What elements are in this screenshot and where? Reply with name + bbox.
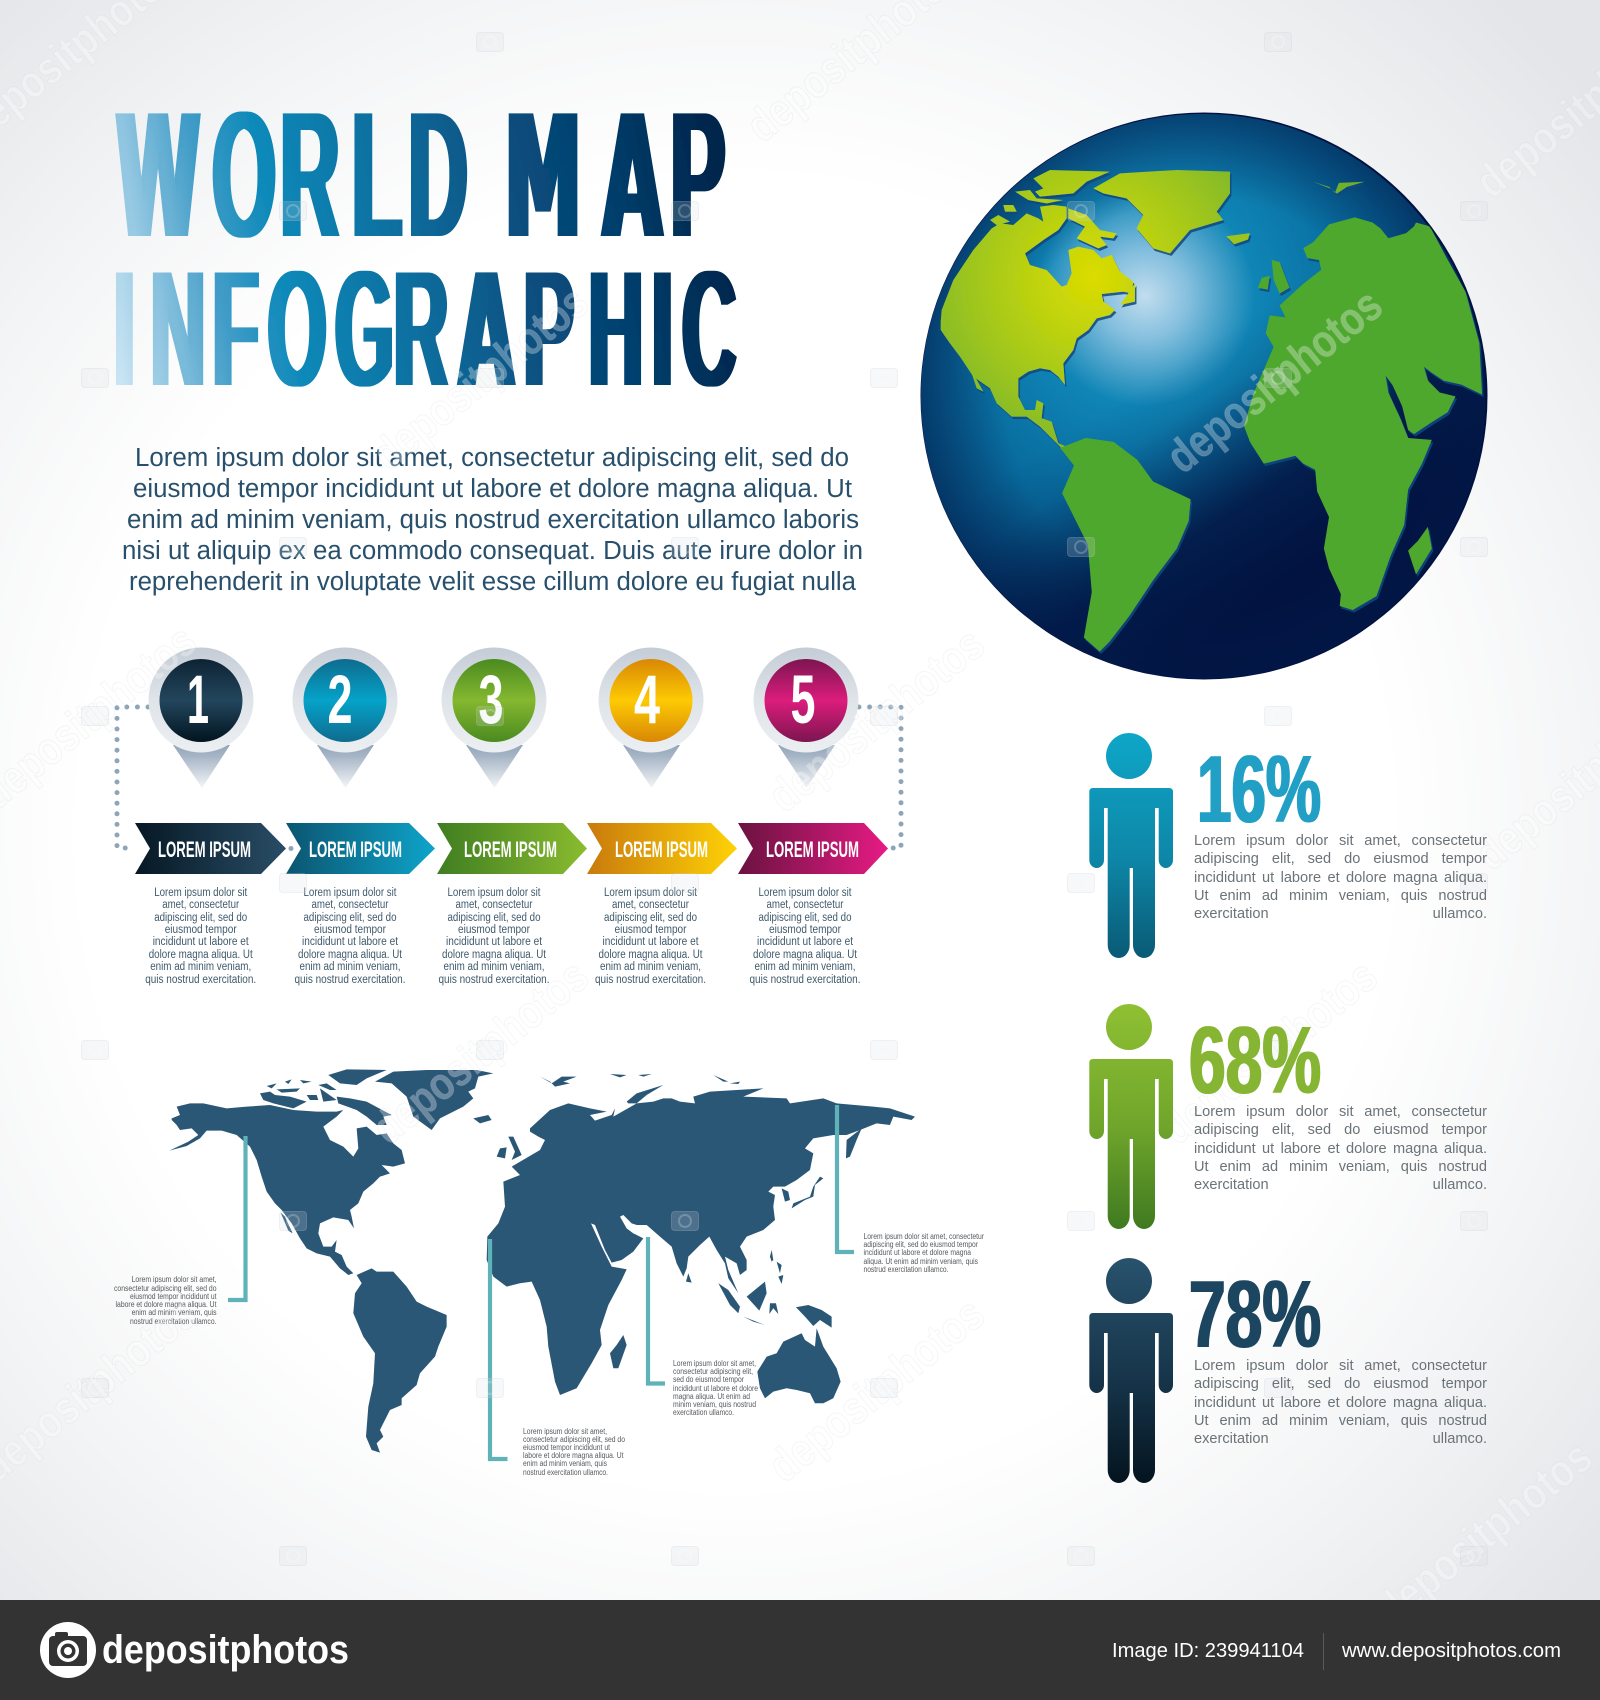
callout text 2: enim ad minim veniam, quis <box>523 1459 607 1468</box>
callout text 3: sed do eiusmod tempor <box>673 1375 744 1384</box>
pin 4: 4 <box>634 661 660 738</box>
step 4 description: enim ad minim veniam, <box>600 961 701 973</box>
step 2 description: quis nostrud exercitation. <box>294 974 406 986</box>
pin 4 <box>598 648 704 788</box>
step 1 description <box>145 887 256 986</box>
footer bar <box>0 1600 1600 1700</box>
callout text 3: magna aliqua. Ut enim ad <box>673 1392 750 1401</box>
text: depositphotos <box>362 949 598 1154</box>
pin 3 <box>442 648 546 788</box>
intro text block: Lorem ipsum dolor sit amet, consectetur adipiscing elit, sed do <box>135 444 849 472</box>
step 3 description: eiusmod tempor <box>458 924 530 936</box>
intro text block: reprehenderit in voluptate velit esse cillum dolore eu fugiat nulla <box>129 568 857 596</box>
callout text 2: consectetur adipiscing elit, sed do <box>523 1435 625 1444</box>
callout text 3: minim veniam, quis nostrud <box>673 1400 756 1409</box>
callout text 1 <box>114 1275 217 1326</box>
step 4 description: incididunt ut labore et <box>602 936 699 948</box>
step 5 description <box>750 887 860 986</box>
arrow 4 <box>587 823 737 874</box>
callout line 4 <box>837 1105 854 1252</box>
step 5 description: quis nostrud exercitation. <box>750 974 860 986</box>
callout line 2 <box>490 1239 508 1459</box>
stat paragraph: Ut enim ad minim veniam, quis nostrud <box>1194 888 1487 904</box>
step 3 description: dolore magna aliqua. Ut <box>442 949 547 961</box>
old world and south america <box>1060 182 1482 651</box>
step 3 description: amet, consectetur <box>456 899 533 911</box>
callout text 4: Lorem ipsum dolor sit amet, consectetur <box>864 1232 984 1241</box>
pin 5 <box>754 648 858 788</box>
text: depositphotos <box>758 617 994 822</box>
step 5 description: enim ad minim veniam, <box>754 961 856 973</box>
callout text 4: incididunt ut labore et dolore magna <box>864 1248 971 1257</box>
step 4 description: eiusmod tempor <box>614 924 687 936</box>
step 1 description: eiusmod tempor <box>165 924 237 936</box>
arrow 5: LOREM IPSUM <box>766 837 859 862</box>
person icon navy <box>1089 1258 1173 1483</box>
text: depositphotos <box>758 1287 994 1492</box>
step 4 description: amet, consectetur <box>612 899 689 911</box>
arrow 2: LOREM IPSUM <box>309 837 402 862</box>
pin 1 <box>148 648 254 788</box>
percent value: 68% <box>1189 1007 1321 1114</box>
step 5 description: incididunt ut labore et <box>757 936 854 948</box>
step 2 description: adipiscing elit, sed do <box>304 912 396 924</box>
callout text 3: consectetur adipiscing elit, <box>673 1367 753 1376</box>
stat paragraph <box>1194 1104 1487 1193</box>
step 3 description: quis nostrud exercitation. <box>438 974 550 986</box>
stat: 68 percent <box>1089 1004 1487 1229</box>
step 2 description: Lorem ipsum dolor sit <box>304 887 397 899</box>
title: INFOGRAPHIC <box>114 233 737 426</box>
americas and arctic <box>169 1069 493 1453</box>
stat paragraph: adipiscing elit, sed do eiusmod tempor <box>1194 1122 1487 1138</box>
stat paragraph: Lorem ipsum dolor sit amet, consectetur <box>1194 1104 1487 1120</box>
pin 2 <box>292 648 398 788</box>
callout text 1: eiusmod tempor incididunt ut <box>130 1292 217 1301</box>
stat paragraph: Lorem ipsum dolor sit amet, consectetur <box>1194 833 1487 849</box>
pin 1: 1 <box>187 661 209 738</box>
intro text block: nisi ut aliquip ex ea commodo consequat. Duis aute irure dolor in <box>122 537 863 565</box>
callout text 3: incididunt ut labore et dolore <box>673 1384 758 1393</box>
step 3 description: adipiscing elit, sed do <box>448 912 540 924</box>
step 4 description: adipiscing elit, sed do <box>604 912 697 924</box>
image id: Image ID: 239941104 <box>1112 1640 1304 1662</box>
callout line 1 <box>228 1136 246 1300</box>
step 1 description: incididunt ut labore et <box>153 936 249 948</box>
callout text 1: nostrud exercitation ullamco. <box>130 1317 216 1326</box>
callout text 4: aliqua. Ut enim ad minim veniam, quis <box>864 1257 978 1266</box>
callout text 3: Lorem ipsum dolor sit amet, <box>673 1359 756 1368</box>
callout text 2: Lorem ipsum dolor sit amet, <box>523 1427 607 1436</box>
stat paragraph <box>1194 1358 1487 1447</box>
text: depositphotos <box>1151 949 1387 1154</box>
step 5 description: dolore magna aliqua. Ut <box>753 949 858 961</box>
step 1 description: amet, consectetur <box>162 899 239 911</box>
percent value: 78% <box>1189 1261 1321 1368</box>
pin 3: 3 <box>478 661 504 738</box>
callout text 2: labore et dolore magna aliqua. Ut <box>523 1451 624 1460</box>
callout text 2 <box>523 1427 625 1477</box>
step 3 description <box>438 887 550 986</box>
stat paragraph: incididunt ut labore et dolore magna aliqua. <box>1194 870 1487 886</box>
stat paragraph: Lorem ipsum dolor sit amet, consectetur <box>1194 1358 1487 1374</box>
step 2 description <box>294 887 406 986</box>
text: depositphotos <box>362 275 598 480</box>
callout text 1: labore et dolore magna aliqua. Ut <box>116 1300 217 1309</box>
pin 5: 5 <box>790 661 816 738</box>
person icon teal <box>1089 733 1173 958</box>
globe <box>920 112 1488 680</box>
arrow 3: LOREM IPSUM <box>464 837 557 862</box>
stat paragraph: incididunt ut labore et dolore magna aliqua. <box>1194 1141 1487 1157</box>
stat paragraph: adipiscing elit, sed do eiusmod tempor <box>1194 1376 1487 1392</box>
pin 2: 2 <box>328 661 352 738</box>
step 2 description: eiusmod tempor <box>314 924 386 936</box>
step 2 description: incididunt ut labore et <box>302 936 399 948</box>
step 5 description: amet, consectetur <box>766 899 844 911</box>
dotted connector <box>117 707 901 848</box>
arrow 1 <box>135 823 286 874</box>
callout text 4 <box>864 1232 984 1274</box>
step 3 description: incididunt ut labore et <box>446 936 543 948</box>
stat paragraph: exercitation ullamco. <box>1194 906 1487 922</box>
arrow 3 <box>437 823 587 874</box>
step 2 description: amet, consectetur <box>312 899 389 911</box>
intro text block: enim ad minim veniam, quis nostrud exercitation ullamco laboris <box>127 506 859 534</box>
flat world map <box>169 1069 915 1453</box>
stat paragraph: adipiscing elit, sed do eiusmod tempor <box>1194 851 1487 867</box>
arrow 5 <box>738 823 888 874</box>
callout text 1: enim ad minim veniam, quis <box>132 1308 217 1317</box>
step 2 description: dolore magna aliqua. Ut <box>298 949 403 961</box>
intro text block <box>122 444 863 596</box>
website: www.depositphotos.com <box>1341 1639 1561 1662</box>
callout line 3 <box>648 1237 665 1384</box>
footer brand name: depositphotos <box>102 1628 349 1672</box>
step 5 description: eiusmod tempor <box>769 924 841 936</box>
stat paragraph <box>1194 833 1487 922</box>
step 3 description: enim ad minim veniam, <box>444 961 544 973</box>
step 4 description <box>595 887 706 986</box>
step 5 description: Lorem ipsum dolor sit <box>758 887 852 899</box>
person icon green <box>1089 1004 1173 1229</box>
intro text block: eiusmod tempor incididunt ut labore et dolore magna aliqua. Ut <box>133 475 852 503</box>
step 4 description: dolore magna aliqua. Ut <box>598 949 703 961</box>
step 4 description: quis nostrud exercitation. <box>595 974 706 986</box>
callout text 1: consectetur adipiscing elit, sed do <box>114 1284 217 1293</box>
title: WORLD MAP <box>115 73 725 279</box>
callout text 2: eiusmod tempor incididunt ut <box>523 1443 611 1452</box>
callout text 2: nostrud exercitation ullamco. <box>523 1468 608 1477</box>
text: depositphotos <box>1156 278 1392 483</box>
step 5 description: adipiscing elit, sed do <box>758 912 852 924</box>
step 1 description: adipiscing elit, sed do <box>154 912 247 924</box>
arrow 4: LOREM IPSUM <box>615 837 708 862</box>
callout text 4: adipiscing elit, sed do eiusmod tempor <box>864 1240 978 1249</box>
step 1 description: quis nostrud exercitation. <box>145 974 256 986</box>
stat: 78 percent <box>1089 1258 1487 1483</box>
stat paragraph: exercitation ullamco. <box>1194 1177 1487 1193</box>
stat paragraph: Ut enim ad minim veniam, quis nostrud <box>1194 1159 1487 1175</box>
stat paragraph: incididunt ut labore et dolore magna aliqua. <box>1194 1395 1487 1411</box>
arrow 2 <box>286 823 435 874</box>
callout text 3 <box>673 1359 758 1417</box>
stat paragraph: exercitation ullamco. <box>1194 1431 1487 1447</box>
stat: 16 percent <box>1089 733 1487 958</box>
percent value: 16% <box>1197 736 1321 843</box>
step 1 description: dolore magna aliqua. Ut <box>149 949 253 961</box>
callout text 4: nostrud exercitation ullamco. <box>864 1265 948 1274</box>
eurasia africa and oceania <box>487 1074 915 1403</box>
callout text 1: Lorem ipsum dolor sit amet, <box>132 1275 217 1284</box>
north america and arctic <box>941 170 1230 448</box>
step 3 description: Lorem ipsum dolor sit <box>448 887 541 899</box>
step 2 description: enim ad minim veniam, <box>300 961 400 973</box>
step 4 description: Lorem ipsum dolor sit <box>604 887 698 899</box>
stat paragraph: Ut enim ad minim veniam, quis nostrud <box>1194 1413 1487 1429</box>
title <box>114 73 737 426</box>
callout text 3: exercitation ullamco. <box>673 1408 734 1417</box>
arrow 1: LOREM IPSUM <box>158 837 251 862</box>
step 1 description: enim ad minim veniam, <box>150 961 251 973</box>
footer logo icon <box>40 1622 96 1678</box>
step 1 description: Lorem ipsum dolor sit <box>154 887 248 899</box>
